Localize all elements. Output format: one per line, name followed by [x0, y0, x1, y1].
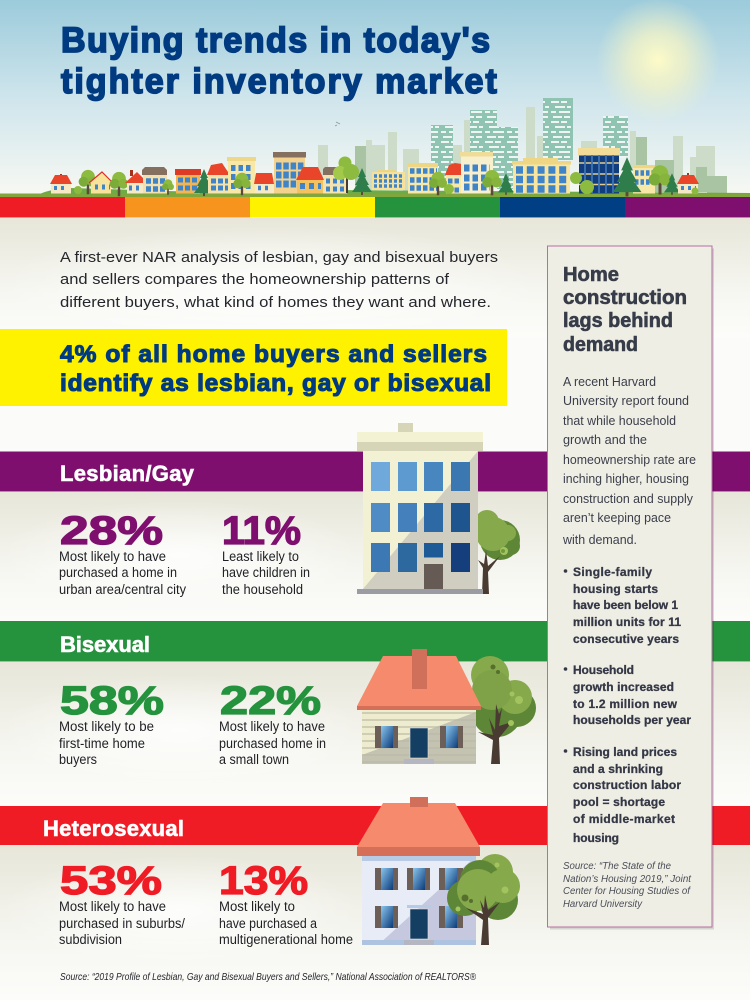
intro paragraph: and sellers compares the homeownership patterns of — [60, 271, 450, 288]
building Q — [578, 148, 620, 194]
stat 53%: 53% — [60, 859, 162, 903]
stat 28%: 28% — [60, 509, 163, 553]
bullet: land prices: Rising land prices — [573, 745, 677, 759]
icon: siding house with tree — [357, 649, 536, 764]
sidebar heading: demand — [563, 334, 638, 356]
header sky — [0, 0, 750, 197]
sidebar paragraph: inching higher, housing — [563, 471, 689, 486]
sidebar source: Center for Housing Studies of — [563, 886, 691, 897]
stat 28%: purchased a home in — [59, 565, 177, 580]
icon: apartment building with tree — [357, 423, 520, 594]
stat 28%: urban area/central city — [59, 582, 186, 597]
bullet: single-family starts: consecutive years — [573, 632, 679, 646]
bullet: land prices: construction labor — [573, 778, 681, 792]
tree — [447, 854, 520, 945]
bullet: land prices: pool = shortage — [573, 795, 665, 809]
stat 11%: the household — [222, 582, 303, 597]
bullet: single-family starts: have been below 1 — [573, 598, 678, 612]
building N — [445, 163, 462, 194]
bullet: land prices: housing — [573, 831, 619, 845]
building G — [227, 157, 256, 194]
yellow callout: 4% of all home buyers and sellers — [60, 341, 487, 368]
bullet: land prices — [564, 745, 681, 845]
house A — [50, 174, 72, 194]
stat 13%: multigenerational home — [219, 932, 353, 947]
sidebar paragraph: aren’t keeping pace — [563, 510, 671, 525]
building M — [408, 163, 438, 194]
sidebar source: Nation’s Housing 2019,” Joint — [563, 874, 692, 885]
stat 53%: Most likely to have — [59, 899, 166, 914]
bullet: single-family starts: Single-family — [573, 565, 652, 579]
bullet: household growth: households per year — [573, 713, 691, 727]
tree — [475, 510, 520, 594]
stat 22%: 22% — [220, 679, 321, 723]
building K — [323, 167, 347, 194]
stat 11%: have children in — [222, 565, 310, 580]
title: tighter inventory market — [61, 62, 497, 101]
tree — [469, 656, 536, 764]
stat 58%: buyers — [59, 752, 97, 767]
yellow callout: identify as lesbian, gay or bisexual — [60, 370, 491, 397]
sidebar paragraph — [562, 374, 696, 547]
sidebar paragraph: growth and the — [563, 432, 647, 447]
bullet: household growth: to 1.2 million new — [573, 697, 678, 711]
stat 22%: a small town — [219, 752, 289, 767]
large tree — [333, 156, 359, 193]
house S — [677, 173, 699, 194]
heading: Heterosexual — [43, 816, 184, 841]
footer source: Source: “2019 Profile of Lesbian, Gay and Bisexual Buyers and Sellers,” National Association of REALTORS® — [60, 971, 476, 983]
panel: heterosexual — [0, 797, 750, 947]
stat 58%: 58% — [60, 679, 164, 723]
ground strip — [0, 188, 750, 197]
bullet: single-family starts — [564, 565, 681, 646]
bullet: land prices: of middle-market — [573, 812, 675, 826]
building O — [460, 152, 493, 194]
stat 58% — [59, 679, 164, 767]
teal towers — [431, 98, 628, 189]
sidebar paragraph: with demand. — [562, 532, 637, 547]
band — [0, 452, 750, 492]
sidebar heading: Home — [563, 264, 619, 286]
background pale buildings — [318, 107, 727, 194]
building E — [175, 169, 201, 194]
bullet: household growth: growth increased — [573, 680, 674, 694]
sidebar source — [563, 861, 692, 910]
stat 22%: Most likely to have — [219, 719, 325, 734]
sidebar paragraph: University report found — [563, 393, 689, 408]
panel: lesbian/gay — [0, 423, 750, 597]
row of town buildings — [50, 148, 699, 196]
panel: home construction sidebar — [548, 246, 714, 930]
stat 58%: Most likely to be — [59, 719, 154, 734]
building D — [142, 167, 167, 194]
building L — [372, 170, 405, 190]
band — [0, 806, 750, 845]
house J — [296, 167, 324, 194]
house B — [89, 172, 113, 194]
building F — [207, 163, 230, 194]
panel: bisexual — [0, 621, 750, 767]
intro paragraph: A first-ever NAR analysis of lesbian, gay and bisexual buyers — [60, 249, 498, 266]
sidebar heading: lags behind — [563, 310, 673, 332]
house C — [125, 170, 148, 194]
bullet: household growth: Household — [573, 663, 634, 677]
sidebar paragraph: A recent Harvard — [563, 374, 656, 389]
stat 13%: 13% — [219, 859, 308, 903]
stat 13% — [219, 859, 353, 947]
stat 28% — [59, 509, 186, 597]
title: Buying trends in today's — [61, 21, 490, 60]
sidebar paragraph: homeownership rate are — [563, 452, 696, 467]
sidebar paragraph: construction and supply — [563, 491, 693, 506]
heading: Lesbian/Gay — [60, 461, 195, 486]
stat 13%: Most likely to — [219, 899, 295, 914]
bullet: household growth — [564, 663, 691, 727]
bullet: single-family starts: million units for 11 — [573, 615, 681, 629]
bullet: land prices: and a shrinking — [573, 762, 663, 776]
bullet: single-family starts: housing starts — [573, 582, 658, 596]
sidebar heading: construction — [563, 287, 687, 309]
heading: Bisexual — [60, 632, 150, 657]
sidebar source: Source: “The State of the — [563, 861, 671, 872]
stat 22%: purchased home in — [219, 736, 326, 751]
stat 11%: Least likely to — [222, 549, 299, 564]
stat 53%: subdivision — [59, 932, 122, 947]
bird — [335, 122, 340, 126]
stat 53% — [59, 859, 185, 947]
yellow callout — [0, 329, 507, 406]
icon: two-storey house with tree — [357, 797, 520, 945]
house H — [254, 173, 274, 194]
sidebar source: Harvard University — [563, 899, 643, 910]
building P — [512, 158, 571, 194]
title — [61, 21, 497, 101]
stat 28%: Most likely to have — [59, 549, 166, 564]
intro paragraph — [60, 249, 498, 311]
stat 11% — [222, 509, 310, 597]
stat 53%: purchased in suburbs/ — [59, 916, 185, 931]
sidebar paragraph: that while household — [563, 413, 676, 428]
stat 58%: first-time home — [59, 736, 145, 751]
rainbow stripe — [0, 197, 750, 218]
stat 11%: 11% — [222, 509, 301, 553]
sidebar heading — [563, 264, 687, 356]
stat 13%: have purchased a — [219, 916, 317, 931]
building I — [273, 152, 306, 194]
band — [0, 621, 750, 662]
intro paragraph: different buyers, what kind of homes they want and where. — [60, 294, 491, 311]
building R — [633, 165, 655, 194]
stat 22% — [219, 679, 326, 767]
city skyline illustration — [0, 98, 750, 197]
